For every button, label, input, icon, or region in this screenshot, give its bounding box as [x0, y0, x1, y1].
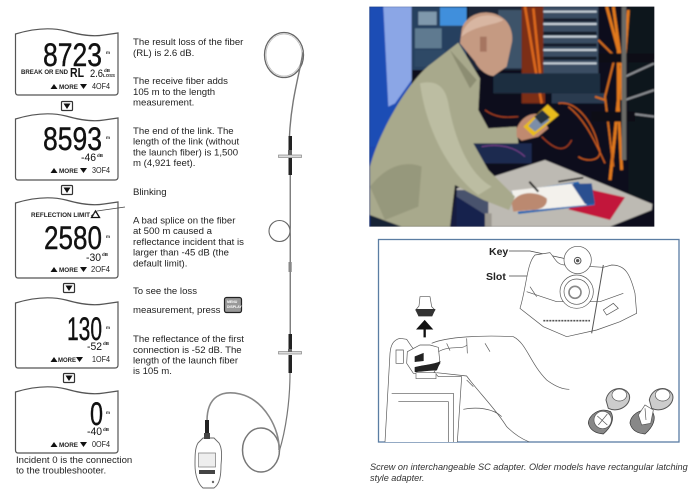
- labels: key and slot: [486, 246, 576, 287]
- removed adapter and up arrow: [416, 297, 435, 337]
- table: [457, 160, 652, 227]
- LCD screen: result 4 of 4: dB: [104, 68, 111, 73]
- caption: SC adapter: [370, 462, 688, 483]
- tester top view: [520, 246, 637, 337]
- LCD screen: result 1 of 4: MORE: [58, 358, 76, 364]
- icon: menu key: MENU: [227, 300, 238, 304]
- fiber link diagram: [195, 32, 304, 488]
- tester held in hand: [385, 336, 569, 442]
- LCD screen: result 4 of 4: 2.6: [90, 68, 103, 80]
- LCD screen: result 4 of 4: 4OF4: [92, 82, 110, 91]
- text: bad splice: default limit).: [133, 258, 187, 270]
- adapter bottom left: [588, 410, 613, 434]
- text: end of the link: length of the link (without: [133, 137, 239, 148]
- head: [460, 12, 512, 76]
- caption: incident 0: [16, 455, 132, 476]
- text: end of the link: m (4,921 feet).: [133, 158, 195, 169]
- text: result loss: The result loss of the fiber: [133, 37, 244, 48]
- diagram frame: [378, 240, 679, 442]
- LCD screen: result 3 of 4: m: [106, 135, 110, 140]
- text: bad splice: larger than -45 dB (the: [133, 248, 229, 258]
- text: end of the link: the launch fiber) is 1,500: [133, 147, 238, 158]
- connector and bulkhead 2: [278, 334, 302, 373]
- text: see the loss measurement: [133, 286, 221, 316]
- LCD screen: result 3 of 4: [16, 114, 118, 180]
- man shirt: [370, 43, 518, 227]
- LCD screen: result 3 of 4: 3OF4: [92, 166, 110, 175]
- text: end of the link: The end of the link. The: [133, 126, 234, 137]
- LCD screen: result 4 of 4: RL: [70, 66, 84, 80]
- hand and tester: [517, 114, 548, 141]
- lower rack: [472, 143, 532, 163]
- LCD screen: result 0 of 4: dB: [103, 427, 110, 432]
- LCD screen: result 1 of 4: -52: [87, 341, 102, 353]
- diagram: adapter installation: [378, 240, 679, 442]
- rack equipment: [412, 7, 467, 70]
- text: see the loss measurement: To see the loss: [133, 286, 197, 297]
- text: result loss: (RL) is 2.6 dB.: [133, 48, 194, 59]
- LCD screen: result 2 of 4 with reflection limit warning: -30: [86, 252, 101, 264]
- text: bad splice: reflectance incident that is: [133, 237, 244, 248]
- text: see the loss measurement: measurement, press: [133, 305, 221, 316]
- LCD screen: result 4 of 4: LOSS: [103, 73, 115, 78]
- text: first connection reflectance: is 105 m.: [133, 366, 172, 377]
- adapter bottom right: [630, 405, 654, 434]
- LCD screen: result 3 of 4: dB: [97, 153, 104, 158]
- arrow button: [62, 186, 72, 194]
- LCD screen: result 0 of 4: MORE: [59, 443, 78, 449]
- tester device: [195, 433, 222, 488]
- text: receive fiber: [133, 76, 228, 108]
- photo: technician with tester at fiber rack: [365, 0, 665, 233]
- text: result loss: [133, 37, 244, 59]
- LCD screen: result 1 of 4: 130: [67, 311, 102, 347]
- LCD screen: result 2 of 4 with reflection limit warning: 2580: [44, 220, 102, 256]
- text: first connection reflectance: [133, 334, 244, 377]
- text: bad splice: [133, 216, 244, 270]
- text: first connection reflectance: length of the launch fiber: [133, 356, 239, 366]
- LCD screen: result 3 of 4: 8593: [43, 121, 102, 157]
- caption: incident 0: Incident 0 is the connection: [16, 455, 132, 466]
- LCD screen: result 2 of 4 with reflection limit warning: MORE: [59, 268, 78, 274]
- main fiber: [289, 175, 291, 335]
- icon: menu key: [224, 298, 243, 312]
- LCD screen: result 0 of 4: 0: [90, 396, 103, 432]
- launch fiber: [205, 373, 290, 472]
- sleeve: [288, 262, 292, 272]
- LCD screen: result 2 of 4 with reflection limit warning: REFLECTION LIMIT: [31, 212, 90, 219]
- text: end of the link: [133, 126, 239, 169]
- LCD screen: result 1 of 4: [16, 298, 118, 368]
- LCD screen: result 4 of 4: [16, 29, 118, 95]
- labels: key and slot: Slot: [486, 271, 506, 283]
- text: bad splice: A bad splice on the fiber: [133, 216, 236, 226]
- LCD screen: result 2 of 4 with reflection limit warning: [16, 198, 118, 278]
- LCD screen: result 4 of 4: 8723: [43, 37, 102, 73]
- blue wall: [369, 7, 412, 160]
- adapter top left: [606, 389, 630, 410]
- LCD screen: result 2 of 4 with reflection limit warning: m: [106, 234, 110, 239]
- text: receive fiber: The receive fiber adds: [133, 76, 228, 87]
- text: bad splice: at 500 m caused a: [133, 226, 213, 237]
- arrow button: [64, 374, 74, 382]
- icon: menu key: DISPLAY: [227, 305, 243, 309]
- labels: key and slot: Key: [489, 246, 508, 258]
- LCD screen: result 0 of 4: -40: [87, 426, 102, 438]
- text: receive fiber: 105 m to the length: [133, 87, 215, 98]
- small fiber loop: [269, 220, 290, 242]
- arrow button: [62, 102, 72, 110]
- LCD screen: result 0 of 4: m: [106, 410, 110, 415]
- adapter top right: [649, 389, 673, 410]
- text: blinking: Blinking: [133, 187, 167, 198]
- caption: incident 0: to the troubleshooter.: [16, 466, 106, 476]
- LCD screen: result 4 of 4: BREAK OR END: [21, 70, 69, 76]
- papers and notebook: [568, 189, 625, 220]
- text: first connection reflectance: connection is -52 dB. The: [133, 345, 242, 356]
- caption: SC adapter: style adapter.: [370, 473, 424, 483]
- caption: SC adapter: Screw on interchangeable SC adapter. Older models have rectangular latching: [370, 462, 688, 472]
- text: receive fiber: measurement.: [133, 98, 194, 108]
- text: first connection reflectance: The reflectance of the first: [133, 334, 244, 345]
- orange cables: [607, 7, 628, 180]
- adapters: [588, 389, 673, 434]
- LCD screen: result 1 of 4: dB: [103, 341, 110, 346]
- LCD screen: result 1 of 4: 1OF4: [92, 355, 110, 364]
- LCD screen: result 0 of 4: 0OF4: [92, 440, 110, 449]
- LCD screen: result 2 of 4 with reflection limit warning: 2OF4: [91, 265, 111, 274]
- LCD screen: result 4 of 4: MORE: [59, 85, 78, 91]
- LCD screen: result 0 of 4: [16, 387, 118, 453]
- receive fiber loop: [264, 32, 304, 136]
- arrow button: [64, 284, 74, 292]
- LCD screen: result 2 of 4 with reflection limit warning: dB: [102, 252, 109, 257]
- LCD screen: result 1 of 4: m: [106, 325, 110, 330]
- LCD screen: result 3 of 4: -46: [81, 152, 96, 164]
- LCD screen: result 4 of 4: m: [106, 50, 110, 55]
- callout line to warning icon: [91, 207, 125, 216]
- connector and bulkhead 1: [278, 136, 302, 175]
- LCD screen: result 3 of 4: MORE: [59, 169, 78, 175]
- writing hand: [512, 193, 547, 212]
